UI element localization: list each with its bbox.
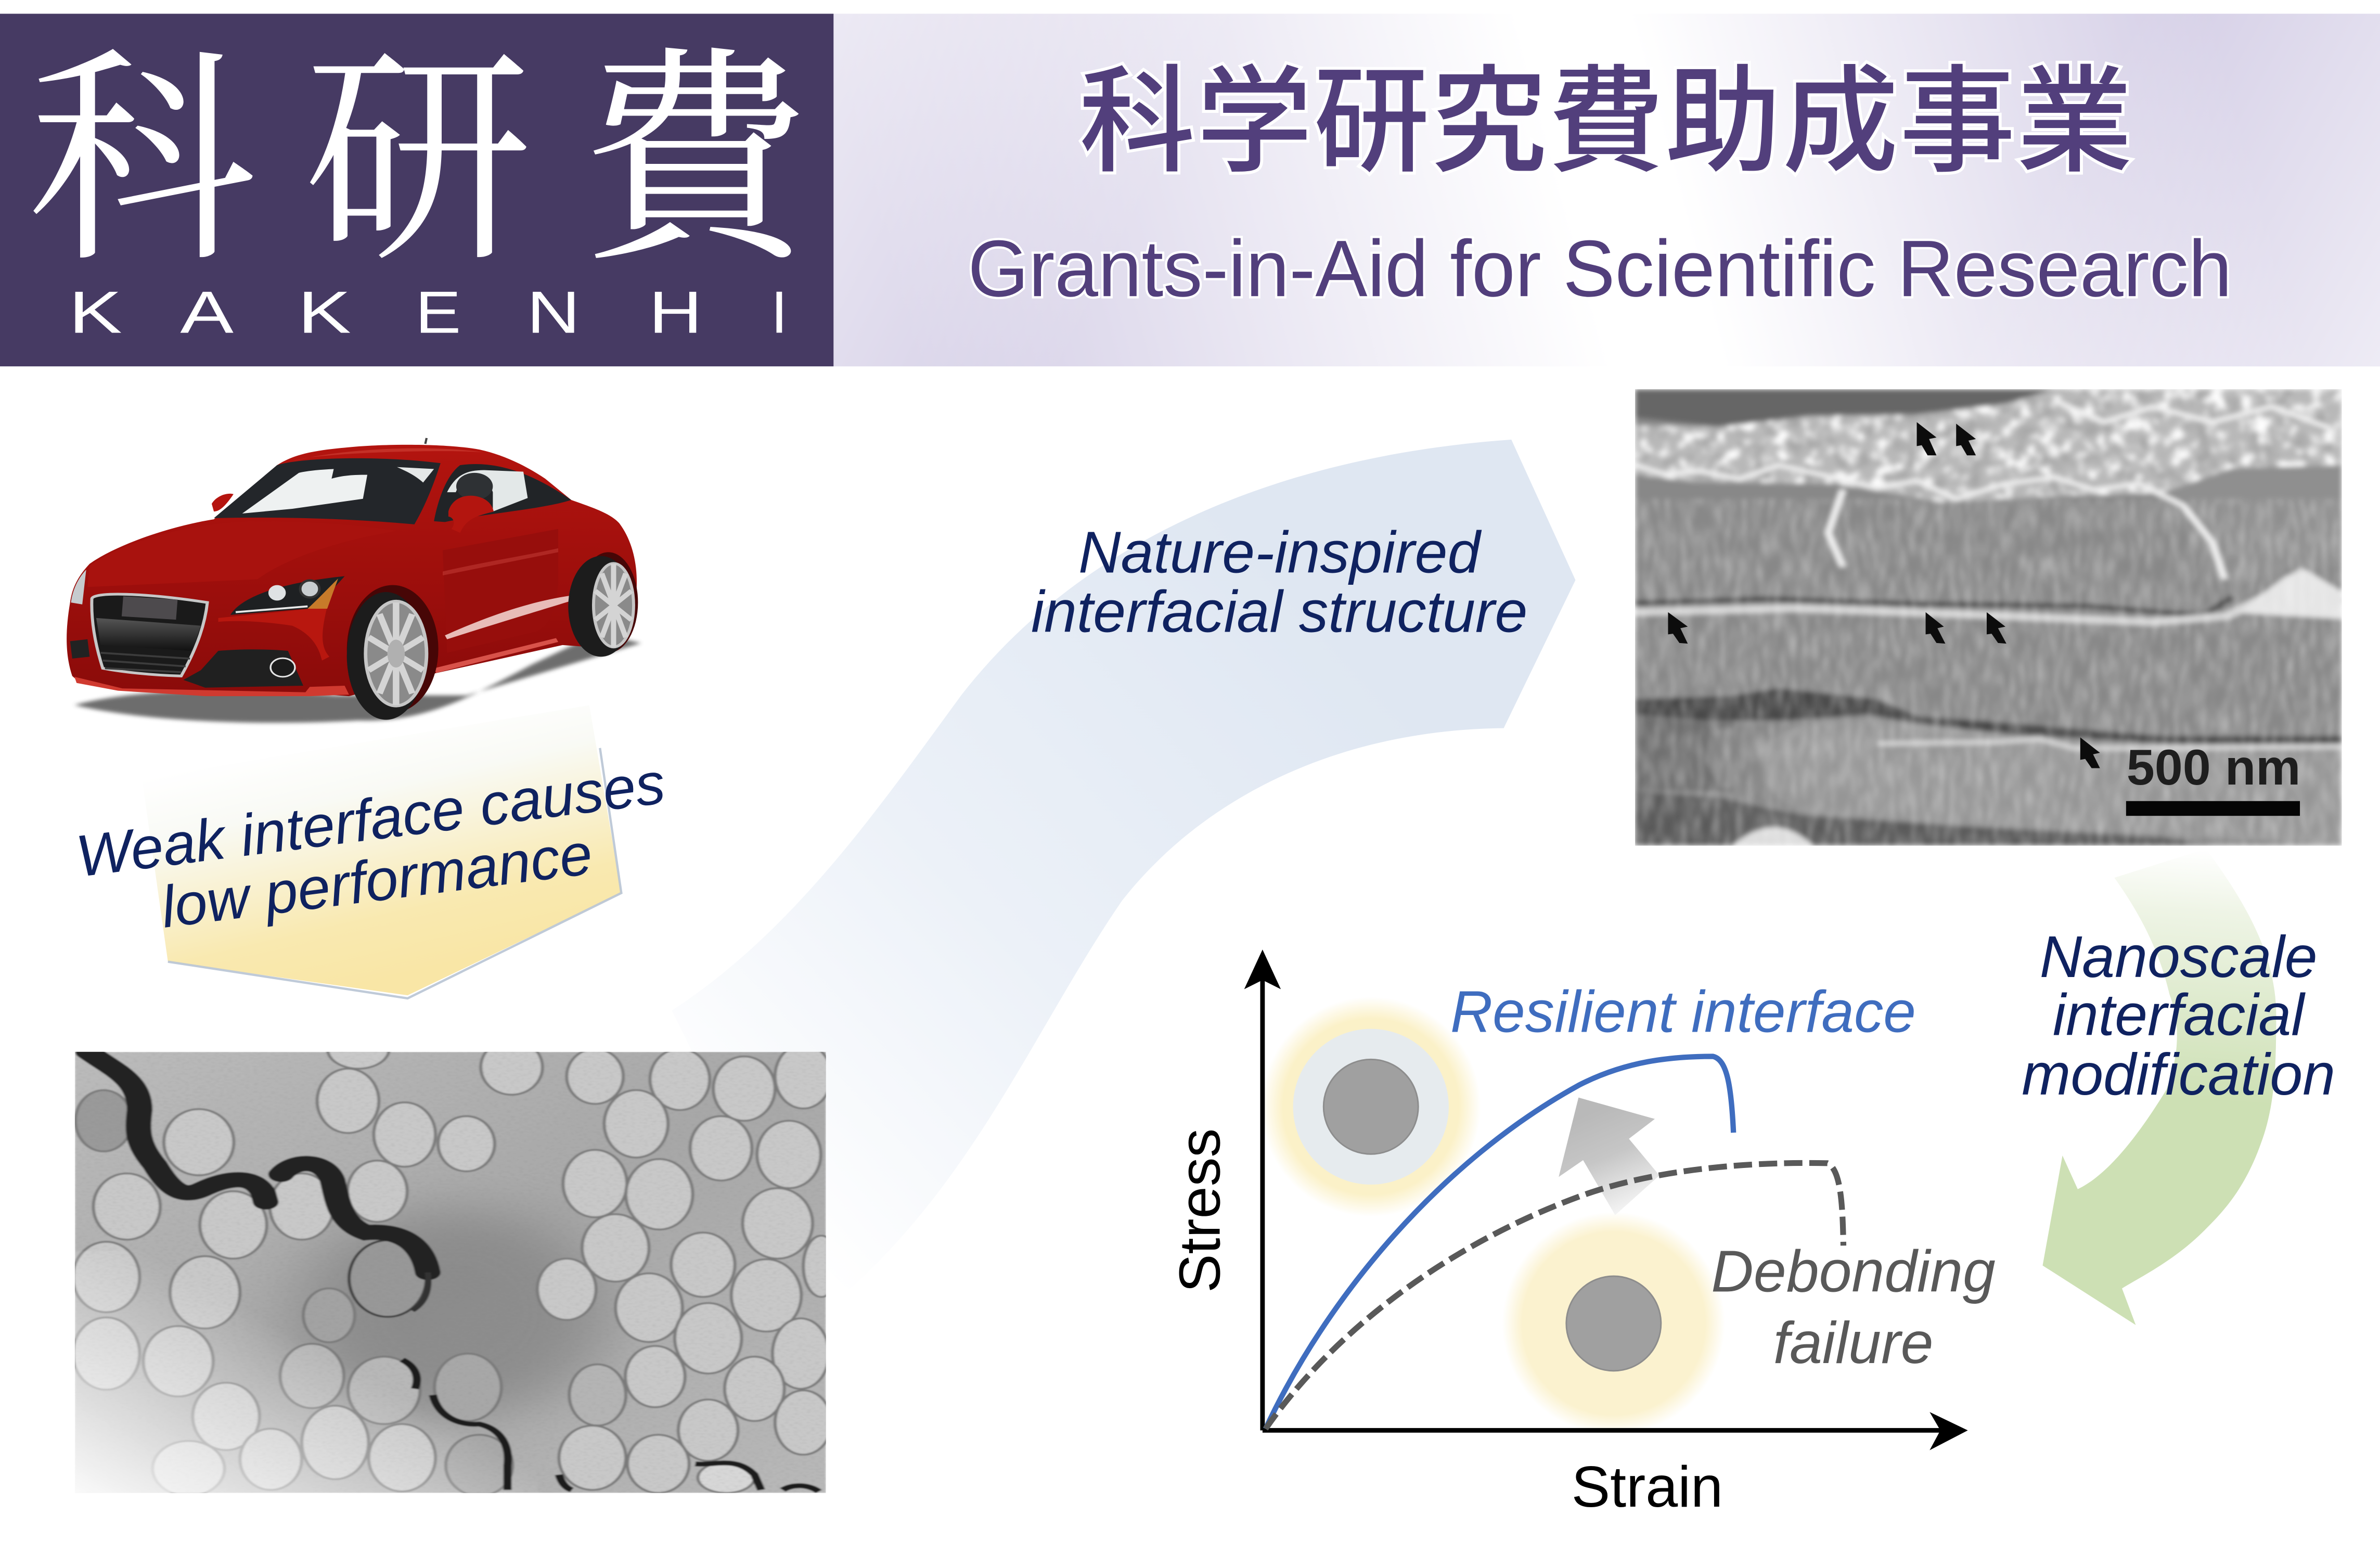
- panel: SEM image of nacre-like layers: [1635, 389, 2342, 846]
- side window glass: [447, 470, 528, 511]
- panel: header banner: [0, 0, 2380, 366]
- particle with resilient interphase: [1261, 997, 1481, 1217]
- axes: [1244, 949, 1968, 1450]
- text: nature-inspired interfacial structure: interfacial structure: [1031, 579, 1527, 645]
- label: debonding failure: failure: [1773, 1310, 1933, 1376]
- logo wordmark: K: [298, 279, 351, 346]
- text: nanoscale interfacial modification: modification: [2022, 1042, 2335, 1107]
- arrow: improvement arrow: [1559, 1098, 1659, 1215]
- sill highlight: [434, 638, 558, 673]
- car ground shadow: [74, 634, 641, 723]
- windshield upper glass: [397, 467, 434, 482]
- SEM streak texture: [1635, 499, 2342, 846]
- car body: [67, 445, 637, 696]
- pentagon lower edge: [168, 748, 621, 998]
- SEM pointer arrows: [1668, 422, 2100, 768]
- right mirror: [448, 496, 494, 533]
- SEM top bright band: [1635, 389, 2342, 502]
- icon: red sports car: [67, 438, 641, 723]
- windshield glass: [242, 469, 367, 513]
- pentagon arrow shape: [142, 705, 621, 995]
- white fade lower-left corner: [75, 1251, 538, 1493]
- SEM lower left block: [1705, 721, 1784, 788]
- dark central zone: [299, 1208, 608, 1417]
- header background with lavender gradient: [833, 14, 2380, 366]
- SEM bright line: [1635, 573, 2342, 622]
- crack lower: [402, 1360, 819, 1492]
- particles: [73, 1029, 839, 1496]
- micrograph background: [75, 1052, 826, 1493]
- grille: [92, 594, 208, 676]
- chart: stress-strain curves: [1167, 949, 1996, 1519]
- crack main: [88, 1052, 428, 1273]
- arrow: green curved arrow: [2042, 849, 2276, 1325]
- front wheel tyre: [347, 592, 426, 720]
- SEM dark speckle: [1635, 389, 2342, 506]
- SEM bright bottom patch: [1732, 827, 1813, 846]
- logo wordmark: K: [69, 279, 122, 346]
- SEM right block: [2163, 465, 2342, 588]
- antenna: [426, 438, 427, 444]
- hood highlight: [87, 521, 397, 587]
- arrow: blue curved arrow to nature-inspired structure: [672, 440, 1575, 1290]
- text: nanoscale interfacial modification: Nanoscale: [2040, 924, 2318, 990]
- front wheel arch: [347, 585, 439, 713]
- curve: resilient interface: [1266, 1056, 1733, 1429]
- SEM lower-left area: [1635, 708, 1733, 791]
- rear wheel rim: [594, 563, 634, 647]
- text: weak interface causes low performance: Weak interface causes: [73, 750, 668, 889]
- text: weak interface causes low performance: low performance: [158, 820, 596, 940]
- windshield frame: [214, 458, 441, 524]
- crack around particle: [413, 1273, 429, 1311]
- SEM lower left dark: [1635, 791, 2212, 846]
- SEM lower block: [1759, 719, 2342, 846]
- text: nature-inspired interfacial structure: Nature-inspired: [1078, 519, 1482, 585]
- heading: English title: Grants-in-Aid for Scientific Research: [968, 224, 2232, 313]
- lower left intake: [70, 639, 89, 659]
- logo wordmark: E: [415, 279, 461, 346]
- side window frame: [434, 464, 571, 522]
- label: debonding failure: Debonding: [1711, 1238, 1996, 1304]
- curve: debonding failure: [1266, 1163, 1843, 1429]
- door upper highlight: [443, 548, 558, 575]
- lower right intake: [184, 649, 303, 688]
- SEM dark gap: [1635, 688, 2342, 743]
- door lower highlight: [445, 596, 584, 639]
- text: weak interface causes low performance: [73, 750, 676, 950]
- SEM lower block highlight: [1877, 739, 2342, 748]
- micrograph grain: [75, 1052, 826, 1493]
- logo wordmark: A: [180, 279, 234, 346]
- text: nanoscale interfacial modification: interfacial: [2053, 982, 2306, 1047]
- headlight: [230, 576, 345, 615]
- SEM bright speckle: [1635, 389, 2342, 506]
- SEM scale label: 500 nm: [2127, 739, 2300, 795]
- front wheel rim: [366, 601, 427, 706]
- rear wheel tyre: [568, 556, 634, 657]
- heading: Japanese title: 科学研究費助成事業: [1079, 28, 2133, 196]
- rear wheel arch: [578, 552, 638, 653]
- x axis label: Strain: [1572, 1454, 1723, 1519]
- logo wordmark: I: [771, 279, 788, 346]
- near seat in side window: [456, 473, 493, 500]
- panel: micrograph of particles with debonding cracks: [73, 1029, 839, 1496]
- door shade: [443, 529, 558, 653]
- logo wordmark: N: [526, 279, 580, 346]
- bumper lower lip: [74, 677, 349, 696]
- logo wordmark: [69, 279, 788, 346]
- left mirror: [212, 494, 234, 511]
- debonded particle: [1502, 1212, 1725, 1435]
- panel: KAKENHI logo: [0, 0, 833, 366]
- SEM bright texture lines: [1635, 401, 2331, 579]
- logo wordmark: H: [649, 279, 702, 346]
- label: resilient interface: Resilient interface: [1450, 979, 1916, 1045]
- front bumper highlight: [218, 607, 329, 661]
- left headlight sliver: [71, 570, 86, 605]
- SEM dark line: [1635, 597, 2232, 616]
- SEM base: [1635, 389, 2342, 846]
- roof highlight: [292, 448, 484, 461]
- callout: yellow pentagon with text: [73, 705, 676, 998]
- SEM right bright patch: [2237, 570, 2342, 619]
- SEM scale bar: [2126, 801, 2300, 816]
- y axis label: Stress: [1167, 1128, 1232, 1293]
- SEM top dark band: [1635, 389, 2055, 427]
- fog lamp: [271, 658, 295, 677]
